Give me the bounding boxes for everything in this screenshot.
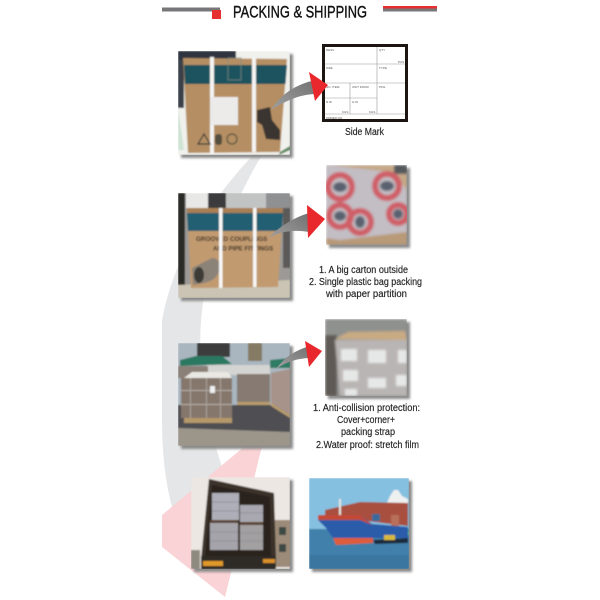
caption: protection notes: packing strap (341, 427, 395, 438)
photo: container ship at sea (309, 478, 412, 572)
photo: carton contents in plastic bags (326, 165, 410, 248)
header decoration: left bar and red square (162, 8, 221, 19)
side mark label diagram: UNIT FROM (352, 85, 369, 89)
background: grey swoosh (162, 155, 262, 507)
caption: protection notes (313, 403, 420, 451)
side mark label diagram: KGS (369, 110, 375, 114)
background: pink polygon (162, 446, 262, 597)
side mark label diagram: N.W (326, 100, 332, 104)
arrow: big carton to contents (268, 205, 325, 238)
photo: loaded container truck (191, 477, 293, 572)
side mark label diagram: SIZE (326, 66, 333, 70)
side mark label diagram (324, 46, 406, 120)
title: PACKING & SHIPPING (233, 2, 367, 22)
side mark label diagram: KGS (342, 110, 348, 114)
photo: big carton outside: AND PIPE FITTINGS (213, 246, 273, 252)
photo: stretch-wrapped carton (325, 319, 410, 399)
caption: carton packing notes: 2. Single plastic bag packing (309, 277, 422, 288)
photo: big carton outside: GROOVED COUPLINGS (196, 236, 267, 243)
side mark label diagram: DESC (326, 48, 335, 52)
arrow: pallets to wrapped carton (276, 341, 322, 369)
side mark label diagram: PKG (379, 85, 386, 89)
caption: carton packing notes (309, 265, 422, 300)
side mark label diagram: QTY (379, 48, 385, 52)
caption: carton packing notes: with paper partition (325, 289, 407, 300)
photo: big carton outside (178, 193, 293, 301)
side mark label diagram: NO. ITEM (326, 85, 340, 89)
header decoration: right bars (383, 6, 437, 12)
caption: side mark: Side Mark (345, 127, 385, 138)
side mark label diagram: ORDER NO. (326, 116, 343, 120)
photo: palletised cartons (178, 343, 293, 449)
caption: protection notes: Cover+corner+ (337, 415, 395, 426)
side mark label diagram: G.W (352, 100, 358, 104)
caption: protection notes: 1. Anti-collision protection: (313, 403, 420, 414)
photo: carton with side mark (178, 51, 293, 158)
arrow: carton to side mark (271, 72, 328, 110)
caption: carton packing notes: 1. A big carton outside (319, 265, 408, 276)
caption: protection notes: 2.Water proof: stretch film (316, 440, 419, 451)
side mark label diagram: TYPE (379, 66, 387, 70)
side mark label diagram: PCS (398, 60, 404, 64)
